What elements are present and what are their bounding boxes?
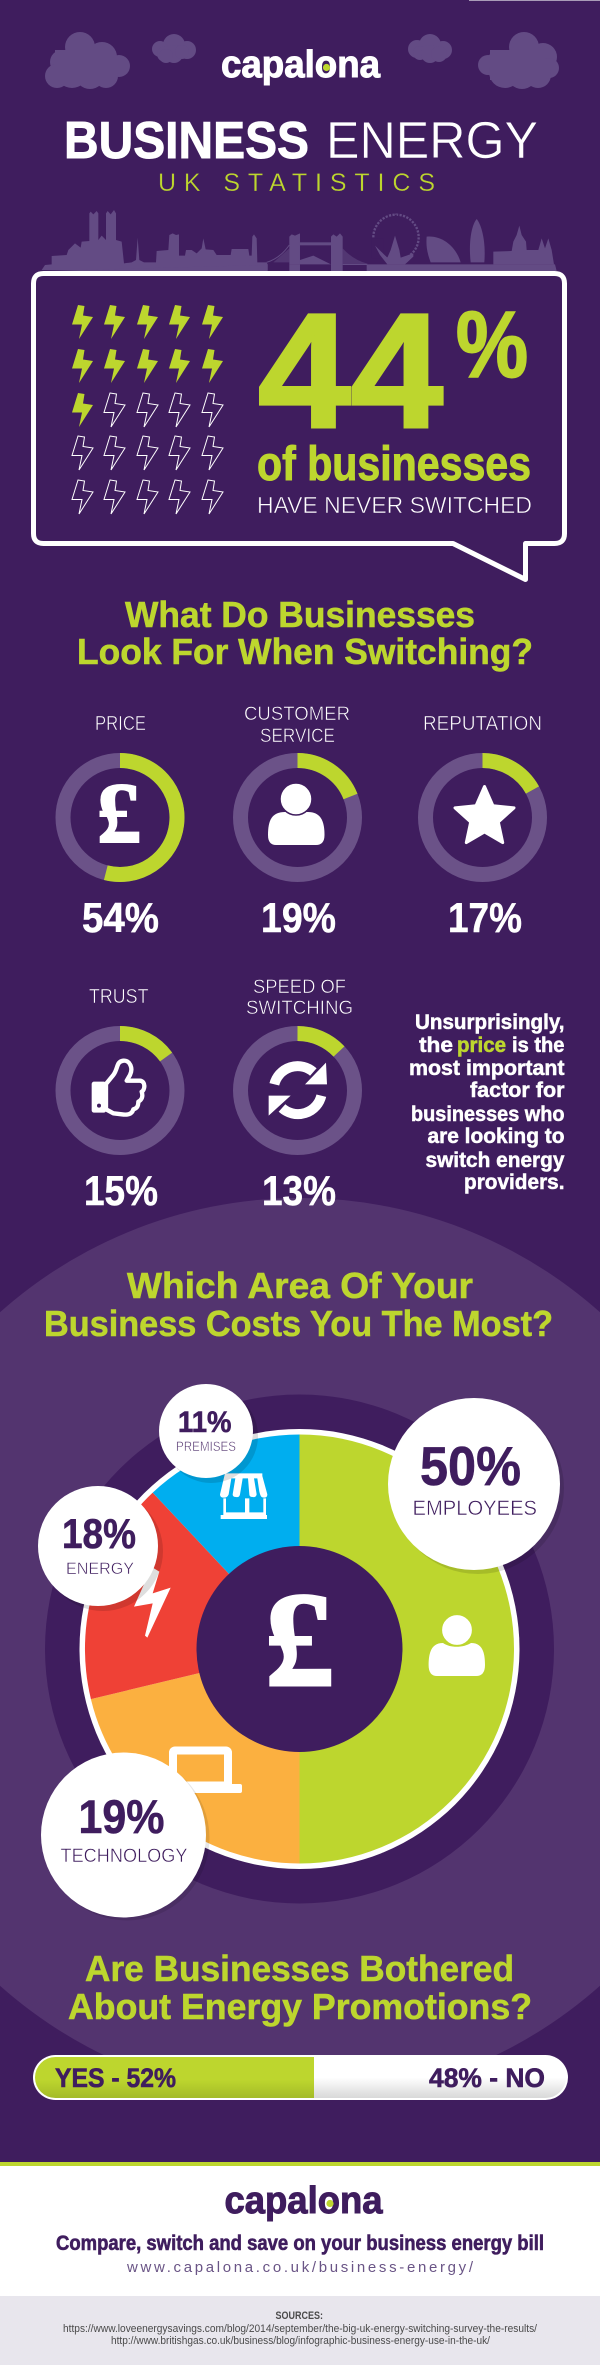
panel: price: £ bbox=[97, 765, 141, 861]
icon: shop bbox=[220, 1473, 267, 1519]
panel: price: PRICE bbox=[95, 713, 146, 735]
icon: laptop bbox=[168, 1750, 242, 1793]
bubble: technology 19%: TECHNOLOGY bbox=[60, 1846, 188, 1867]
logo: capalona: capalona bbox=[221, 44, 381, 86]
panel: customer service: CUSTOMER bbox=[244, 704, 350, 725]
panel: speed of switching: 13% bbox=[262, 1167, 336, 1214]
bubble: technology 19% bbox=[41, 1752, 210, 1920]
icon: lightning bolt bbox=[134, 1565, 171, 1638]
text: sources: https://www.loveenergysavings.com/blog/2014/september/the-big-uk-energy-switching-survey-the-results/ bbox=[63, 2323, 538, 2335]
title: BUSINESS bbox=[64, 112, 309, 170]
heading: what do businesses look for: Look For When Switching? bbox=[77, 631, 533, 672]
panel: trust bbox=[63, 986, 177, 1214]
heading: energy promotions: About Energy Promotions? bbox=[68, 1986, 532, 2027]
bubble: technology 19%: 19% bbox=[78, 1790, 164, 1843]
logo: capalona footer: capalona bbox=[224, 2180, 383, 2222]
stat: 44%: 44 bbox=[258, 279, 443, 462]
heading: which area costs most: Which Area Of Your bbox=[127, 1265, 473, 1306]
bubble: energy 18%: 18% bbox=[62, 1510, 136, 1557]
text: url: www.capalona.co.uk/business-energy/ bbox=[126, 2259, 474, 2276]
chart: cost pie: £ bbox=[265, 1566, 334, 1715]
background large circle bbox=[0, 1198, 600, 2100]
text block: price note: Unsurprisingly, bbox=[415, 1011, 564, 1034]
heading: energy promotions bbox=[68, 1948, 532, 2027]
text block: price note: businesses who bbox=[411, 1103, 564, 1126]
text: tagline: Compare, switch and save on your business energy bill bbox=[56, 2232, 544, 2255]
panel: trust: 15% bbox=[84, 1167, 158, 1214]
panel: speed of switching bbox=[240, 977, 354, 1214]
text block: price note: are looking to bbox=[428, 1125, 564, 1148]
panel: customer service: SERVICE bbox=[260, 726, 335, 747]
heading: which area costs most bbox=[44, 1265, 553, 1344]
text: sources: SOURCES: bbox=[276, 2310, 323, 2322]
bubble: energy 18%: ENERGY bbox=[66, 1559, 134, 1578]
text: have never switched: HAVE NEVER SWITCHED bbox=[257, 492, 532, 518]
text block: price note: most important bbox=[409, 1057, 564, 1080]
bubble: premises 11% bbox=[159, 1384, 258, 1483]
text block: price note: providers. bbox=[464, 1171, 564, 1194]
bubble: premises 11%: PREMISES bbox=[176, 1438, 236, 1454]
panel: price bbox=[63, 713, 177, 941]
chart: yes no bar: YES - 52% bbox=[55, 2063, 176, 2093]
icon: clouds bbox=[45, 32, 559, 89]
icon grid: lightning bolts bbox=[72, 305, 223, 514]
chart: cost pie bbox=[38, 1384, 564, 1920]
icon: person on pie bbox=[429, 1614, 485, 1676]
panel: speed of switching: SPEED OF bbox=[253, 977, 346, 998]
panel: reputation: REPUTATION bbox=[423, 713, 542, 735]
bubble: employees 50% bbox=[388, 1398, 564, 1574]
subtitle: UK STATISTICS bbox=[158, 169, 435, 197]
text: sources bbox=[63, 2310, 538, 2347]
text: sources: http://www.britishgas.co.uk/business/blog/infographic-business-energy-use-in-the-uk/ bbox=[111, 2335, 491, 2347]
panel: speed of switching: SWITCHING bbox=[246, 998, 353, 1019]
panel: speech bubble bbox=[34, 274, 564, 580]
bubble: premises 11%: 11% bbox=[178, 1406, 232, 1439]
text block: price note: the bbox=[419, 1034, 453, 1057]
panel: customer service: 19% bbox=[261, 894, 336, 941]
chart: yes no bar bbox=[33, 2055, 568, 2100]
bubble: employees 50%: 50% bbox=[420, 1435, 521, 1497]
bubble: employees 50%: EMPLOYEES bbox=[412, 1497, 537, 1520]
heading: what do businesses look for bbox=[77, 594, 533, 672]
panel: price: 54% bbox=[82, 894, 159, 941]
heading: energy promotions: Are Businesses Bothered bbox=[85, 1948, 514, 1989]
chart: yes no bar: 48% - NO bbox=[429, 2063, 545, 2093]
panel: reputation: 17% bbox=[448, 894, 522, 941]
footer panel bbox=[0, 2162, 600, 2365]
text block: price note: switch energy bbox=[426, 1149, 565, 1172]
text block: price note: factor for bbox=[470, 1079, 564, 1102]
heading: what do businesses look for: What Do Businesses bbox=[125, 594, 475, 635]
title: ENERGY bbox=[326, 112, 538, 170]
text: of businesses: of businesses bbox=[257, 438, 531, 491]
heading: which area costs most: Business Costs You The Most? bbox=[44, 1303, 553, 1344]
text block: price note: price bbox=[457, 1034, 506, 1057]
stat: 44%: % bbox=[456, 292, 528, 397]
text block: price note: is the bbox=[512, 1034, 564, 1057]
panel: customer service bbox=[240, 704, 354, 941]
panel: trust: TRUST bbox=[89, 986, 148, 1008]
stat: 44% bbox=[258, 279, 528, 462]
bubble: energy 18% bbox=[38, 1486, 163, 1611]
panel: reputation bbox=[423, 713, 542, 941]
text block: price note bbox=[409, 1011, 565, 1194]
title bbox=[64, 112, 538, 170]
skyline bbox=[42, 210, 557, 271]
